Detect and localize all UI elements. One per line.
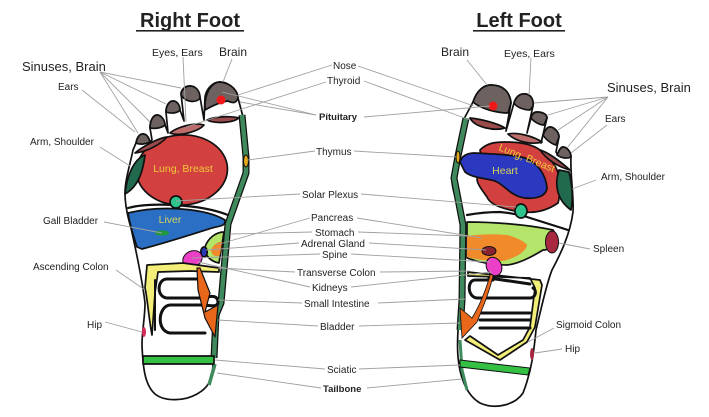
- labels: centre organs: Thyroid: [327, 76, 360, 87]
- left zone: hip: [530, 348, 534, 360]
- labels: left foot: Brain: [441, 45, 469, 59]
- labels: centre organs: Bladder: [320, 322, 355, 333]
- labels: right foot: Ascending Colon: [33, 262, 109, 273]
- right foot diagram: [125, 82, 248, 400]
- left foot diagram: [452, 85, 573, 406]
- right zone: bladder: [197, 268, 218, 337]
- right red dot pituitary: [216, 96, 226, 104]
- right zone: liver: [128, 209, 225, 249]
- right zone: arm and shoulder: [125, 155, 145, 194]
- right zone: adrenal gland: [201, 247, 207, 257]
- right zone: ascending colon: [145, 263, 219, 335]
- labels: left foot: Sigmoid Colon: [556, 320, 621, 331]
- right zone: kidney: [180, 248, 205, 270]
- left zone: toes: [473, 85, 571, 158]
- labels: right foot: Arm, Shoulder: [30, 137, 95, 148]
- right label: Lung, Breast: Lung, Breast: [153, 163, 213, 175]
- labels: centre organs: Solar Plexus: [302, 190, 358, 201]
- left zone: heart: [460, 153, 547, 198]
- right zone: sciatic spine strip: [214, 115, 246, 358]
- title: Right Foot: Right Foot: [140, 10, 240, 32]
- labels: right foot: Hip: [87, 320, 102, 331]
- labels: centre organs: Adrenal Gland: [301, 239, 365, 250]
- labels: centre organs: Small Intestine: [304, 299, 370, 310]
- right zone: sciatic band: [143, 356, 214, 364]
- left zone: lung and breast: [477, 142, 560, 212]
- labels: right foot: Sinuses, Brain: [22, 59, 106, 74]
- labels: centre organs: Pituitary: [319, 112, 358, 123]
- left red dot pituitary: [488, 102, 498, 110]
- labels: left foot: [441, 45, 691, 355]
- left zone: spleen: [546, 231, 558, 253]
- right zone: lung and breast: [135, 133, 229, 207]
- left zone: thymus: [456, 151, 460, 163]
- labels: right foot: Gall Bladder: [43, 216, 99, 227]
- labels: centre organs: Stomach: [315, 228, 354, 239]
- right label: Liver: Liver: [159, 214, 182, 226]
- labels: centre organs: [297, 61, 376, 395]
- left label: Heart: Heart: [492, 165, 518, 177]
- left zone: solar plexus: [515, 204, 527, 218]
- labels: centre organs: Pancreas: [311, 213, 353, 224]
- labels: centre organs: Nose: [333, 61, 357, 72]
- left label: Lung, Breast: Lung, Breast: [497, 142, 557, 175]
- labels: right foot: Brain: [219, 45, 247, 59]
- right zone: stomach and pancreas: [205, 232, 224, 263]
- labels: centre organs: Transverse Colon: [297, 268, 376, 279]
- leader lines: [82, 57, 608, 388]
- left foot outline: [452, 85, 573, 406]
- labels: centre organs: Spine: [322, 250, 348, 261]
- right zone: diaphragm line: [128, 205, 228, 215]
- labels: centre organs: Thymus: [316, 147, 352, 158]
- labels: centre organs: Tailbone: [323, 384, 361, 395]
- title: Left Foot: Left Foot: [476, 10, 562, 32]
- left zone: diaphragm line: [467, 212, 568, 230]
- right zone: toes: [136, 82, 238, 144]
- labels: right foot: Ears: [58, 82, 79, 93]
- labels: left foot: Spleen: [593, 244, 624, 255]
- right zone: hip: [142, 327, 146, 337]
- labels: centre organs: Sciatic: [327, 365, 356, 376]
- labels: right foot: [22, 45, 247, 331]
- right zone: small intestine: [159, 279, 218, 333]
- left zone: thyroid pads: [508, 133, 542, 143]
- left zone: kidney: [483, 255, 505, 278]
- left zone: stomach and pancreas: [467, 222, 556, 265]
- labels: left foot: Arm, Shoulder: [601, 172, 666, 183]
- labels: left foot: Hip: [565, 344, 580, 355]
- right foot outline: [125, 82, 247, 400]
- left zone: sigmoid colon: [465, 272, 542, 360]
- labels: left foot: Eyes, Ears: [504, 48, 555, 60]
- right zone: thymus: [244, 155, 248, 167]
- right zone: gall bladder: [155, 230, 169, 236]
- left zone: small intestine: [469, 278, 535, 298]
- left zone: sciatic band: [460, 360, 530, 375]
- left zone: arm and shoulder: [557, 170, 572, 210]
- left zone: sciatic spine strip: [454, 118, 466, 330]
- right zone: thyroid pads: [170, 124, 204, 134]
- labels: right foot: Eyes, Ears: [152, 47, 203, 59]
- left zone: spine and bladder: [460, 272, 494, 338]
- labels: left foot: Ears: [605, 114, 626, 125]
- labels: centre organs: Kidneys: [312, 283, 348, 294]
- right zone: solar plexus: [170, 196, 182, 208]
- left zone: adrenal gland: [482, 246, 496, 256]
- labels: left foot: Sinuses, Brain: [607, 80, 691, 95]
